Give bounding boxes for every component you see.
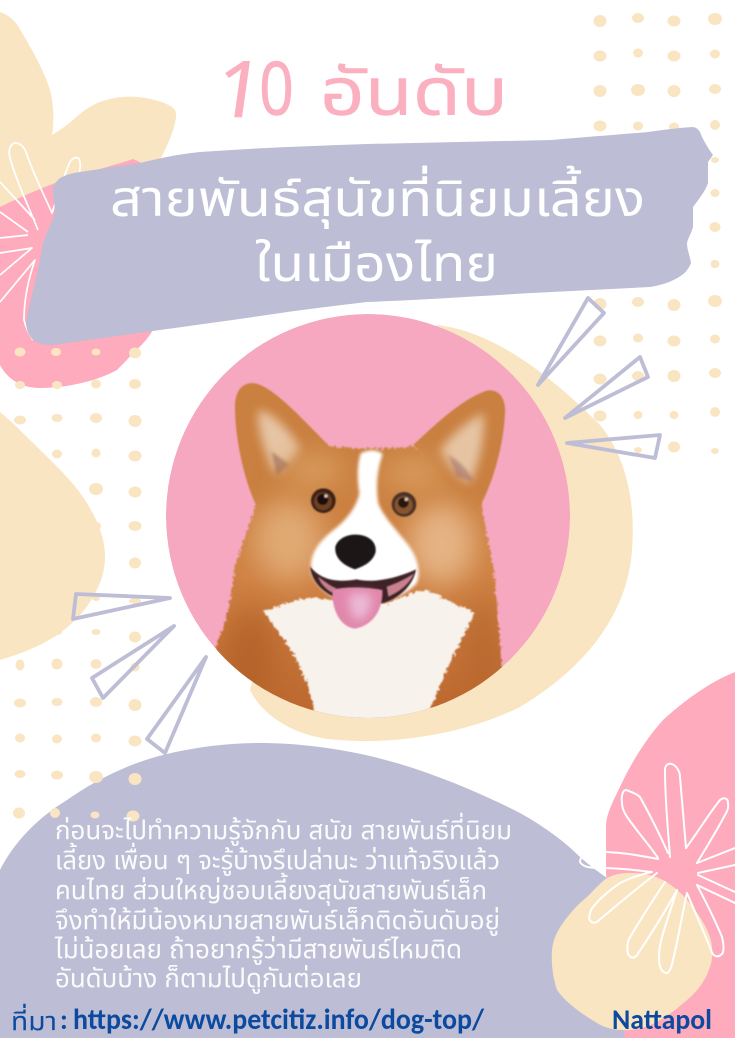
photo background: [166, 314, 570, 718]
body text: ก่อนจะไปทำความรู้จักกับ สนัข สายพันธ์ที่นิยม: [55, 812, 512, 846]
mouth: [310, 567, 416, 603]
body text: ไม่น้อยเลย ถ้าอยากรู้ว่ามีสายพันธ์ไหมติด: [54, 934, 462, 965]
tongue: [332, 587, 382, 629]
source line: ที่มา: [11, 1003, 57, 1036]
author name: Nattapol: [612, 1002, 712, 1037]
dot pattern: top right: [594, 13, 722, 454]
nose: [335, 535, 376, 569]
corgi: [207, 383, 507, 737]
decorative blob: bottom-right pink: [606, 672, 735, 1038]
title: 10 อันดับ: อันดับ: [320, 55, 508, 129]
decorative blob: top-left pink: [0, 159, 165, 388]
photo: corgi in pink circle: [166, 314, 570, 737]
ears: [235, 383, 505, 513]
body text: อันดับบ้าง ก็ตามไปดูกันต่อเลย: [55, 963, 362, 994]
accent triangles: lower left: [73, 594, 206, 753]
flower outline: top left: [0, 143, 80, 340]
body text: เลี้ยง เพื่อน ๆ จะรู้บ้างรึเปล่านะ ว่าแท้จริงแล้ว: [55, 842, 500, 876]
title: 10 อันดับ: [207, 35, 508, 153]
inner shading clipped to silhouette: [227, 410, 498, 700]
body text: [54, 812, 512, 994]
decorative blob: left middle beige: [0, 412, 105, 660]
title band text: สายพันธ์สุนัขที่นิยมเลี้ยง: [110, 165, 645, 229]
title: 10 อันดับ: 0: [259, 37, 294, 149]
source line: :: [60, 1002, 68, 1037]
decorative blob: bottom lavender: [0, 743, 640, 1038]
eye left: [311, 488, 336, 513]
eye right: [392, 492, 416, 517]
accent triangles: upper right: [538, 298, 660, 458]
source line: https://www.petcitiz.info/dog-top/: [73, 1001, 485, 1037]
decorative blob: top-left beige: [0, 12, 176, 240]
decorative blob: bottom-right beige: [552, 873, 712, 1030]
title: 10 อันดับ: 1: [207, 35, 271, 153]
coat silhouette with fur edge: [207, 446, 507, 737]
title band: [26, 127, 713, 345]
white chest: [263, 591, 475, 723]
flower outline: bottom right: [580, 764, 735, 973]
white blaze and muzzle: [311, 450, 419, 603]
body text: จึงทำให้มีน้องหมายสายพันธ์เล็กติดอันดับอยู่: [55, 905, 500, 936]
title band text: [110, 165, 645, 292]
title band text: ในเมืองไทย: [255, 236, 498, 292]
decorative blob: beige behind photo: [250, 325, 633, 741]
dot pattern: left: [13, 348, 142, 822]
body text: คนไทย ส่วนใหญ่ชอบเลี้ยงสุนัขสายพันธ์เล็ก: [55, 872, 487, 906]
